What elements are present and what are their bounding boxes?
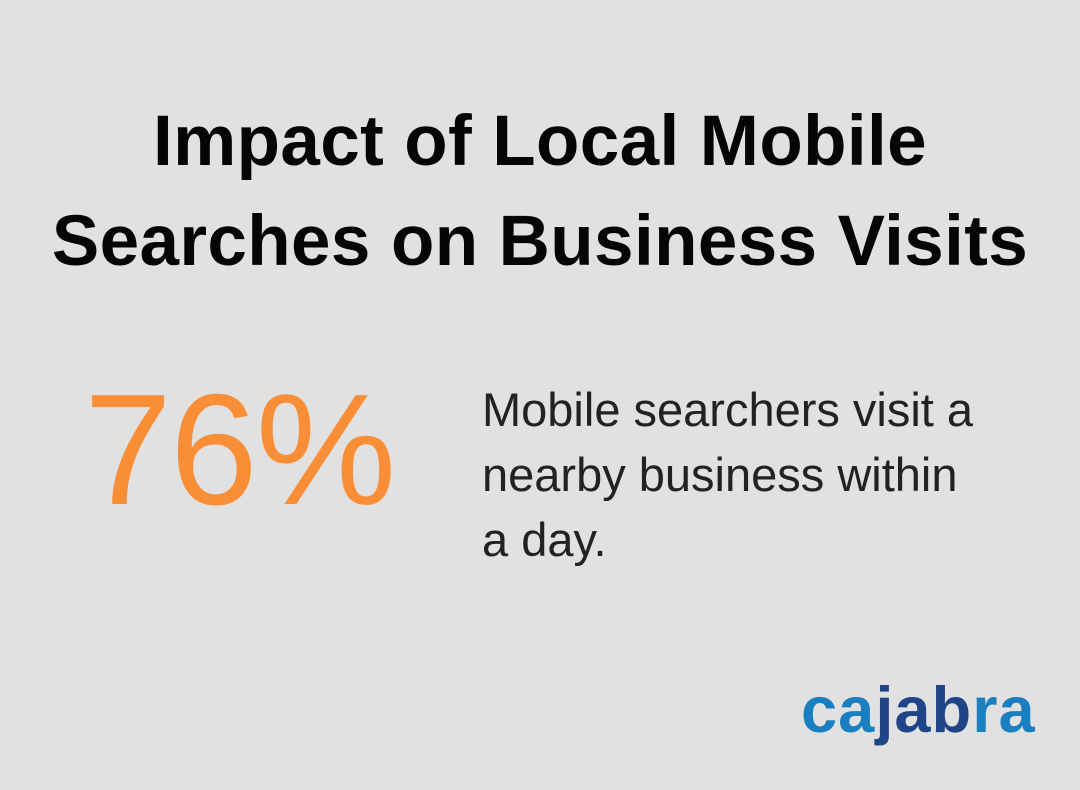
- title: Searches on Business Visits: [52, 202, 1028, 281]
- description text: [482, 383, 973, 566]
- description text: a day.: [482, 513, 607, 566]
- title: [52, 102, 1028, 281]
- statistic: 76%: 76%: [84, 362, 394, 538]
- description text: Mobile searchers visit a: [482, 383, 973, 436]
- title: Impact of Local Mobile: [153, 102, 927, 181]
- logo: cajabra: cajabra: [801, 673, 1036, 746]
- description text: nearby business within: [482, 448, 958, 501]
